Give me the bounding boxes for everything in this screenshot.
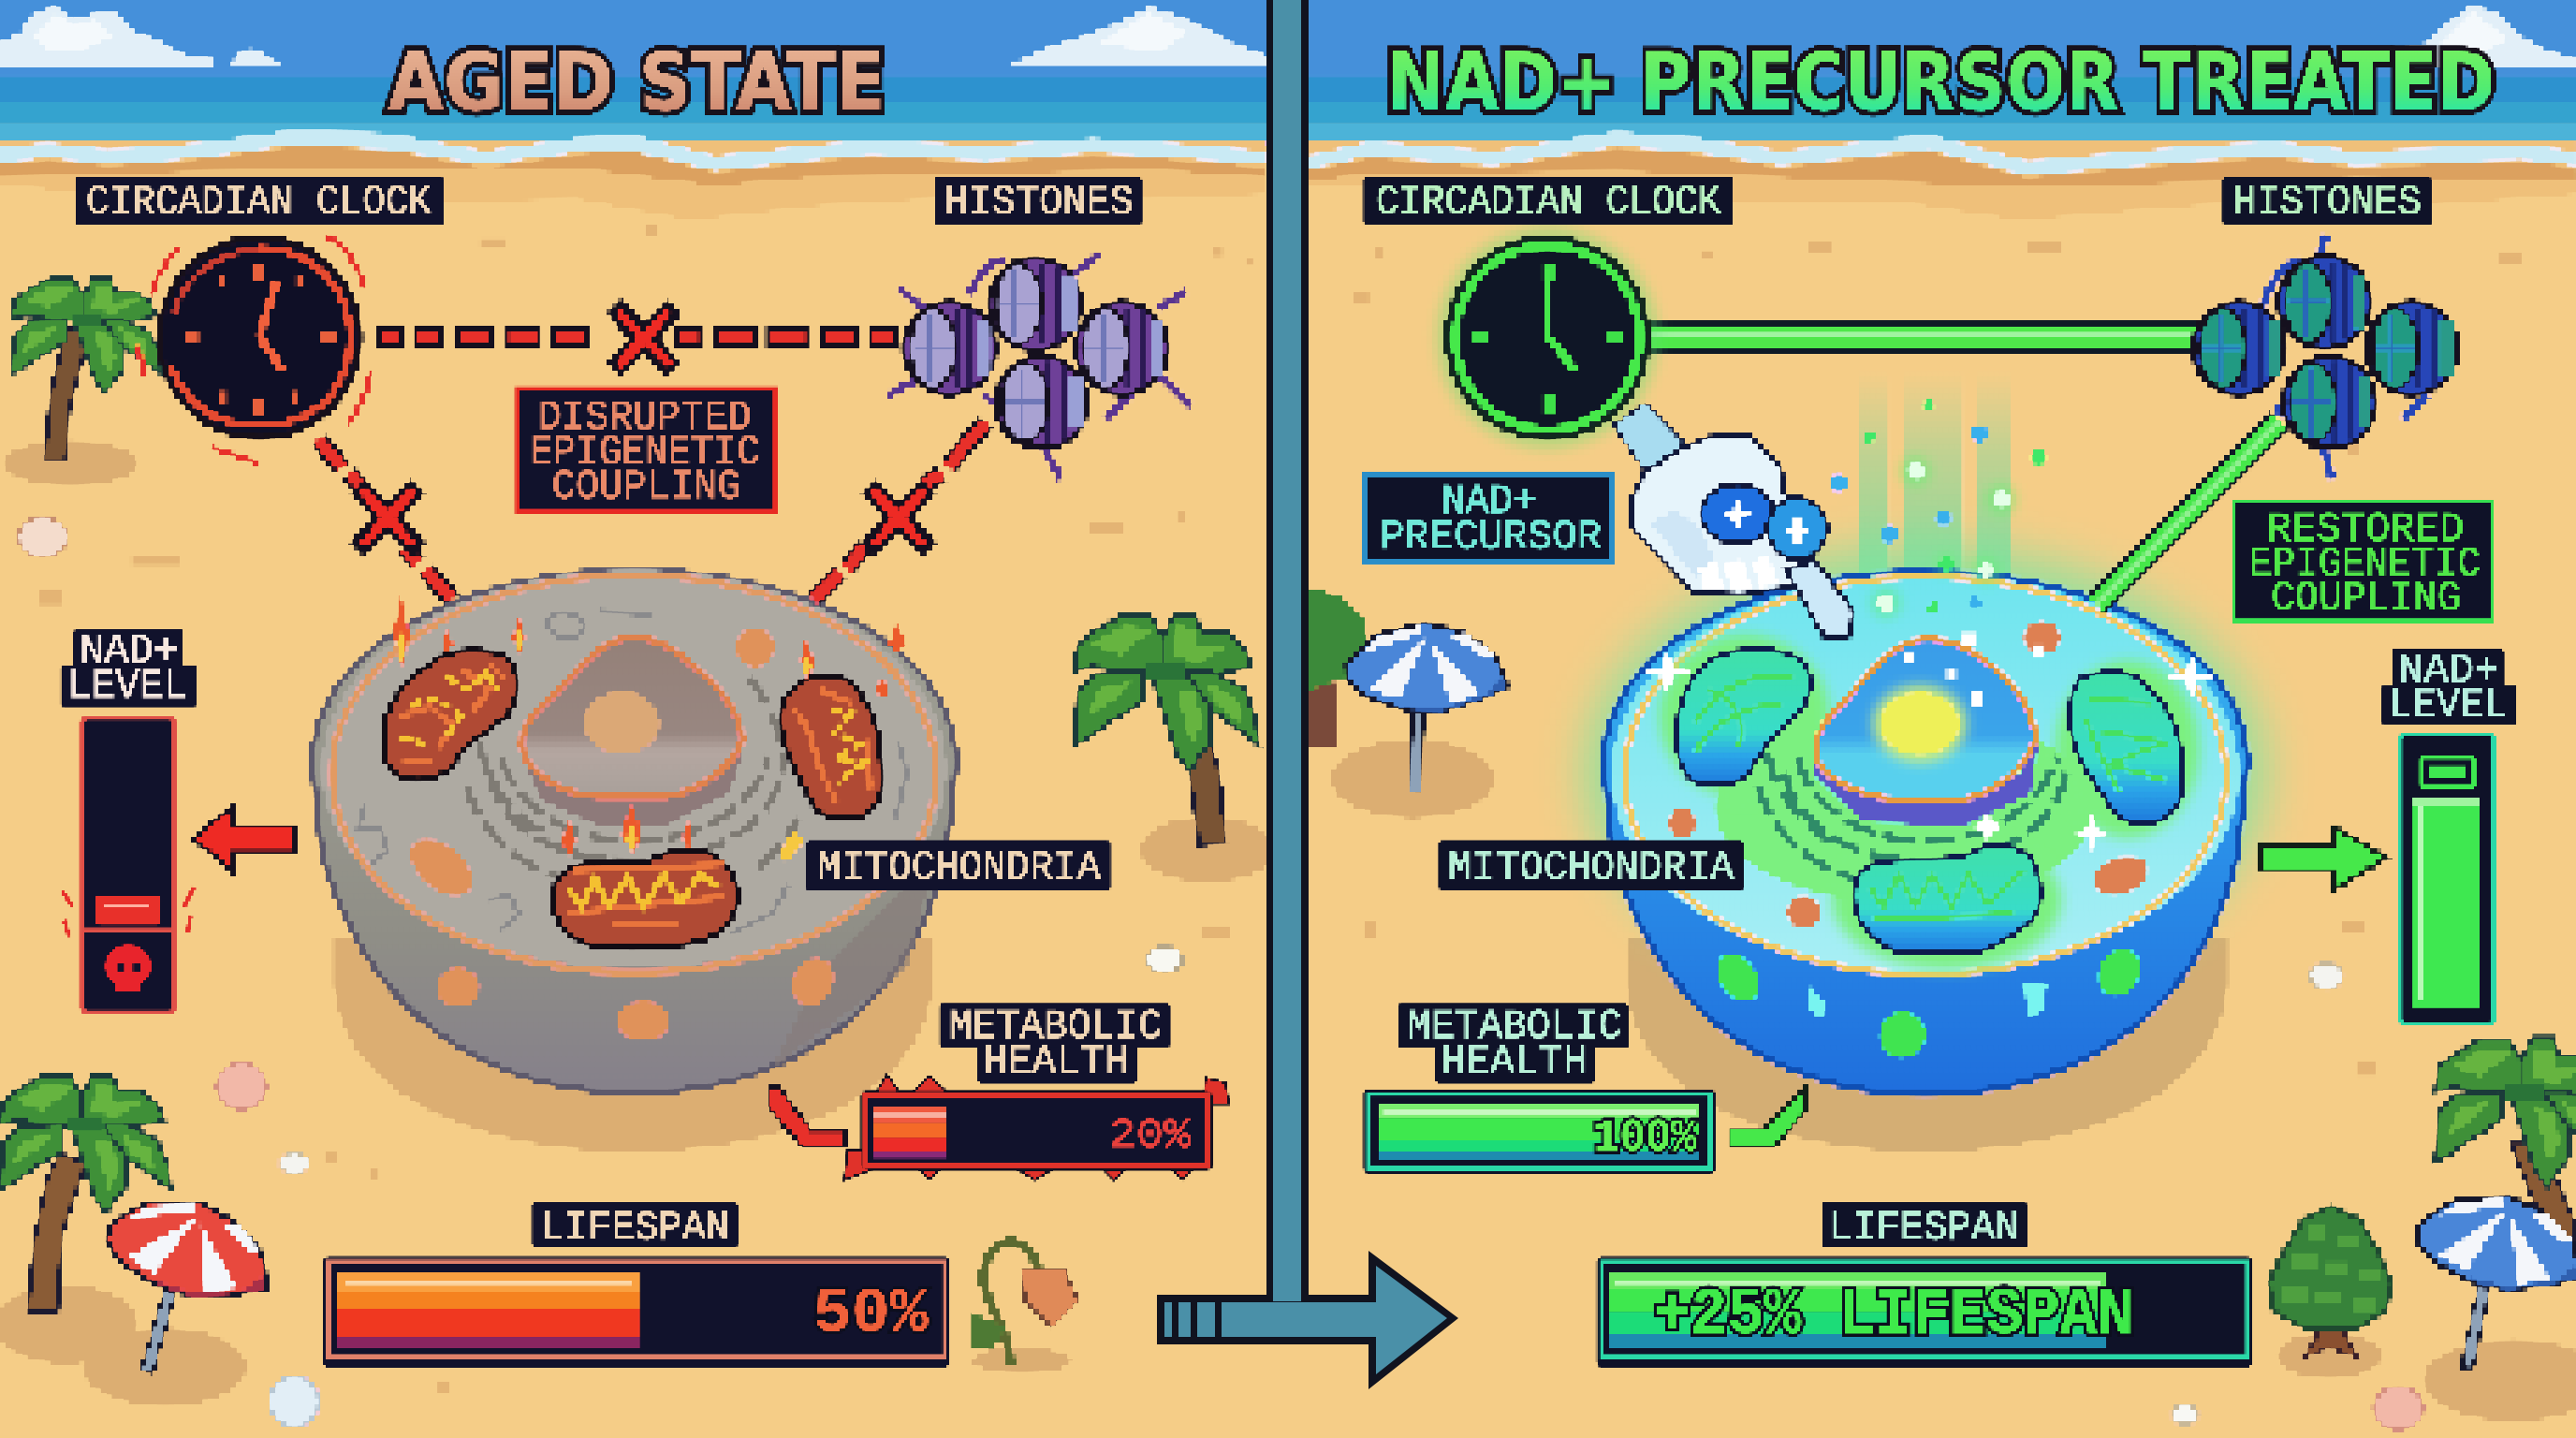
mitochondrion: upper left	[383, 651, 517, 780]
label: NAD+ level, aged: NAD+	[80, 628, 178, 675]
label: NAD+ level, treated	[2382, 648, 2517, 729]
mitochondrion: upper right	[781, 676, 882, 819]
palm: left panel right side	[1075, 614, 1275, 882]
clouds	[0, 5, 2576, 69]
panel divider and transition arrow	[1157, 0, 1458, 1389]
cell shadow	[333, 936, 933, 1152]
callout: restored epigenetic coupling: COUPLING	[2271, 576, 2461, 623]
dashed link: clock to histones, disrupted	[378, 329, 895, 346]
callout: NAD+ precursor: NAD+	[1442, 479, 1537, 526]
warning sparks	[63, 888, 194, 936]
palm: bottom right	[2436, 1037, 2576, 1265]
callout: disrupted epigenetic coupling: COUPLING	[552, 464, 741, 511]
connector bar: histones to cell, restored	[2096, 420, 2280, 605]
gauge: NAD+ level, treated	[2400, 734, 2494, 1023]
label: NAD+ level, treated: LEVEL	[2389, 682, 2508, 729]
nucleus	[1814, 639, 2041, 827]
icon: skull	[105, 945, 151, 992]
umbrella: blue striped, bottom right	[2414, 1191, 2576, 1421]
hand with NAD+ precursor pills	[1613, 403, 1854, 639]
mitochondrion: upper left	[1676, 650, 1810, 785]
callout: NAD+ precursor: PRECURSOR	[1380, 514, 1602, 561]
break mark: right diagonal	[866, 483, 931, 552]
bar: lifespan +25%: +25% LIFESPAN	[1653, 1279, 2134, 1353]
sand speckles	[39, 224, 2524, 1393]
gauge: NAD+ level, aged	[63, 718, 194, 1012]
callout: disrupted epigenetic coupling: DISRUPTED	[538, 395, 752, 442]
particles	[1829, 400, 2047, 618]
label: circadian clock, treated: CIRCADIAN CLOCK	[1376, 180, 1720, 227]
umbrella: red striped	[82, 1203, 268, 1406]
fill	[1378, 1104, 1699, 1160]
bar: metabolic health 20%: 20%	[1109, 1113, 1192, 1160]
label: circadian clock, aged: CIRCADIAN CLOCK	[86, 180, 432, 227]
clock: aged	[138, 235, 372, 463]
mitochondrion: upper right	[2070, 672, 2183, 823]
cell body	[312, 570, 956, 1093]
sparkles	[1645, 592, 2215, 851]
crags	[844, 1075, 1229, 1180]
wilted plant	[969, 1242, 1077, 1373]
light shafts above cell	[1858, 372, 2012, 575]
bar: lifespan 50%	[324, 1257, 949, 1367]
label: metabolic health, aged: METABOLIC	[949, 1004, 1163, 1050]
nucleus	[521, 638, 744, 827]
fill	[337, 1271, 639, 1349]
shells	[18, 518, 2423, 1430]
dashed link: clock to cell, disrupted	[318, 439, 452, 600]
label: metabolic health, aged: HEALTH	[983, 1039, 1130, 1086]
side organelles	[1708, 942, 2148, 1058]
green halo	[1715, 713, 2096, 903]
flames	[392, 596, 907, 858]
bar: lifespan 50%: 50%	[813, 1280, 929, 1351]
bar: metabolic health 100%: 100%	[1593, 1112, 1697, 1165]
callout: restored epigenetic coupling: EPIGENETIC	[2249, 541, 2481, 588]
histones: aged	[887, 255, 1191, 479]
label: NAD+ level, aged	[61, 628, 198, 711]
label: metabolic health, treated: HEALTH	[1442, 1039, 1588, 1086]
cell glow	[1584, 546, 2267, 999]
cell: aged	[312, 570, 956, 1152]
label: histones, treated: HISTONES	[2232, 180, 2422, 227]
dashed link: histones to cell, disrupted	[813, 422, 986, 600]
label: NAD+ level, treated: NAD+	[2398, 648, 2499, 695]
label: metabolic health, treated	[1398, 1004, 1628, 1086]
bar: metabolic health 20%	[844, 1075, 1229, 1180]
break mark: top	[611, 304, 677, 373]
organelle blobs	[400, 627, 842, 1041]
index finger	[1786, 560, 1854, 639]
small palm: right panel left edge	[1310, 588, 1371, 748]
fill	[874, 1106, 946, 1158]
palm: bottom left	[0, 1075, 171, 1364]
label: metabolic health, treated: METABOLIC	[1407, 1004, 1622, 1050]
label: histones, aged: HISTONES	[944, 180, 1134, 227]
callout: restored epigenetic coupling	[2234, 501, 2492, 623]
title: aged state: AGED STATE	[388, 37, 886, 130]
label: mitochondria, treated: MITOCHONDRIA	[1448, 845, 1734, 892]
pill	[1767, 498, 1827, 559]
green check arrow: to metabolic bar	[1730, 1088, 1806, 1147]
cell body	[1603, 572, 2247, 1094]
label: mitochondria, aged: MITOCHONDRIA	[817, 845, 1101, 892]
mitochondrion: bottom	[1854, 845, 2041, 953]
bar: metabolic health 100%	[1364, 1090, 1715, 1173]
label: lifespan, aged: LIFESPAN	[540, 1205, 729, 1252]
palm: top left	[4, 277, 162, 486]
tree: healthy	[2269, 1206, 2392, 1378]
label: NAD+ level, aged: LEVEL	[67, 664, 187, 711]
histones: treated	[2193, 235, 2457, 479]
red down arrow: left bar	[194, 805, 296, 873]
callout: NAD+ precursor	[1365, 474, 1612, 561]
break mark: left diagonal	[355, 483, 420, 552]
label: metabolic health, aged	[940, 1004, 1170, 1086]
clock: treated	[1436, 226, 1660, 449]
pill	[1701, 484, 1774, 543]
umbrella: blue striped, mid	[1331, 607, 1528, 818]
callout: restored epigenetic coupling: RESTORED	[2267, 506, 2464, 553]
red arrow: to metabolic bar	[768, 1088, 846, 1147]
green arrow: to right bar	[2261, 827, 2387, 890]
fill	[1610, 1271, 2106, 1349]
cell: treated	[1584, 546, 2267, 1152]
connector bar: clock to histones, restored	[1643, 322, 2204, 355]
callout: disrupted epigenetic coupling: EPIGENETIC	[530, 430, 760, 477]
bar: lifespan +25%	[1597, 1257, 2252, 1367]
cell shadow	[1626, 936, 2228, 1152]
mitochondrion: bottom	[553, 849, 738, 948]
fingers	[1699, 555, 1778, 592]
label: lifespan, treated: LIFESPAN	[1828, 1205, 2019, 1252]
callout: disrupted epigenetic coupling	[518, 389, 775, 512]
